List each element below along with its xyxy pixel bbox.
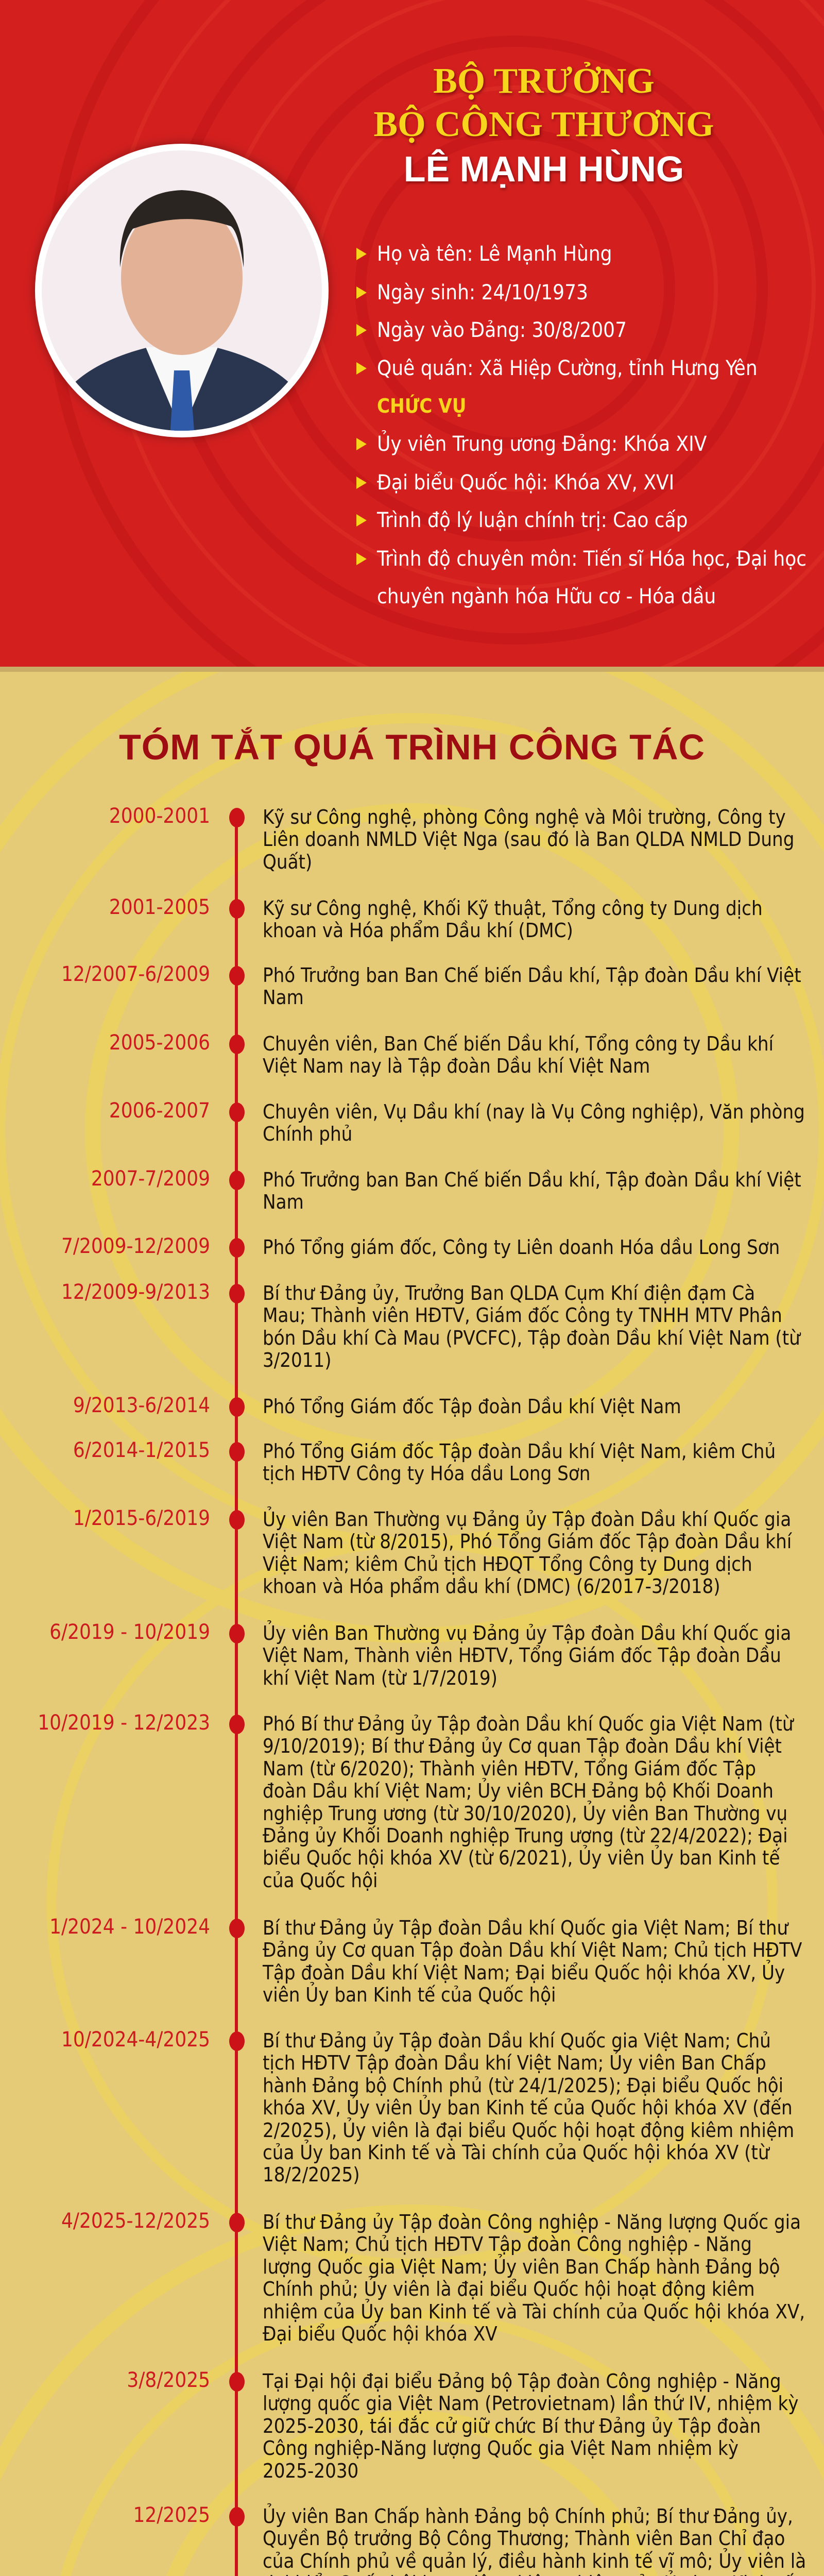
entry 2005-2006: 2005-2006: [109, 1031, 210, 1055]
section heading: TÓM TẮT QUÁ TRÌNH CÔNG TÁC: [119, 727, 705, 767]
entry 6/2019-10/2019: [49, 1620, 791, 1689]
entry 1/2015-6/2019: [73, 1506, 792, 1598]
entry 1/2024-10/2024: Bí thư Đảng ủy Tập đoàn Dầu khí Quốc gia Việt Nam; Bí thư: [263, 1917, 788, 1939]
entry 7/2009-12/2009: [61, 1234, 780, 1259]
info list: Đại biểu Quốc hội: Khóa XV, XVI: [377, 471, 674, 495]
title: BỘ TRƯỞNG: [433, 61, 655, 101]
entry 6/2014-1/2015: tịch HĐTV Công ty Hóa dầu Long Sơn: [263, 1462, 590, 1485]
info list: Ngày vào Đảng: 30/8/2007: [377, 318, 627, 342]
info list: Trình độ lý luận chính trị: Cao cấp: [377, 509, 688, 532]
entry 10/2024-4/2025: của Ủy ban Kinh tế và Tài chính của Quốc hội khóa XV (từ: [263, 2141, 769, 2164]
entry 10/2024-4/2025: 18/2/2025): [263, 2163, 360, 2186]
info list: CHỨC VỤ: [377, 395, 466, 417]
entry 6/2019-10/2019: Ủy viên Ban Thường vụ Đảng ủy Tập đoàn Dầu khí Quốc gia: [263, 1622, 791, 1645]
info list: Ủy viên Trung ương Đảng: Khóa XIV: [377, 432, 707, 456]
entry 3/8/2025: Công nghiệp-Năng lượng Quốc gia Việt Nam nhiệm kỳ: [263, 2437, 739, 2460]
entry 3/8/2025: lượng quốc gia Việt Nam (Petrovietnam) lần thứ IV, nhiệm kỳ: [263, 2392, 799, 2415]
entry 10/2019-12/2023: đoàn Dầu khí Việt Nam; Ủy viên BCH Đảng bộ Khối Doanh: [263, 1780, 774, 1802]
entry 2007-7/2009: Nam: [263, 1191, 304, 1213]
entry 1/2024-10/2024: viên Ủy ban Kinh tế của Quốc hội: [263, 1984, 556, 2006]
entry 1/2015-6/2019: Việt Nam; kiêm Chủ tịch HĐQT Tổng Công ty Dung dịch: [263, 1553, 752, 1575]
entry 2001-2005: 2001-2005: [109, 895, 210, 919]
entry 2006-2007: Chính phủ: [263, 1123, 352, 1145]
name: LÊ MẠNH HÙNG: [404, 149, 684, 189]
entry 2006-2007: 2006-2007: [109, 1099, 210, 1123]
entry 1/2024-10/2024: Tập đoàn Dầu khí Việt Nam; Đại biểu Quốc hội khóa XV, Ủy: [263, 1961, 785, 1984]
entry 2007-7/2009: Phó Trưởng ban Ban Chế biến Dầu khí, Tập đoàn Dầu khí Việt: [263, 1168, 801, 1191]
entry 4/2025-12/2025: Đại biểu Quốc hội khóa XV: [263, 2323, 497, 2345]
entry 9/2013-6/2014: 9/2013-6/2014: [73, 1394, 210, 1417]
entry 4/2025-12/2025: [61, 2209, 805, 2345]
entry 2000-2001: [109, 804, 794, 873]
entry 12/2007-6/2009: Phó Trưởng ban Ban Chế biến Dầu khí, Tập đoàn Dầu khí Việt: [263, 964, 801, 987]
entry 12/2007-6/2009: [61, 962, 801, 1009]
entry 1/2024-10/2024: Đảng ủy Cơ quan Tập đoàn Dầu khí Việt Nam; Chủ tịch HĐTV: [263, 1939, 802, 1961]
entry 4/2025-12/2025: 4/2025-12/2025: [61, 2209, 210, 2233]
entry 2006-2007: [109, 1099, 805, 1145]
entry 12/2025: [133, 2503, 806, 2576]
entry 6/2014-1/2015: 6/2014-1/2015: [73, 1438, 210, 1462]
entry 2005-2006: Chuyên viên, Ban Chế biến Dầu khí, Tổng công ty Dầu khí: [263, 1032, 774, 1055]
entry 10/2019-12/2023: của Quốc hội: [263, 1869, 378, 1892]
title: [373, 61, 715, 191]
entry 2000-2001: 2000-2001: [109, 804, 210, 828]
entry 9/2013-6/2014: [73, 1394, 681, 1418]
entry 12/2025: Ủy viên Ban Chấp hành Đảng bộ Chính phủ; Bí thư Đảng ủy,: [263, 2505, 793, 2528]
entry 3/8/2025: Tại Đại hội đại biểu Đảng bộ Tập đoàn Công nghiệp - Năng: [263, 2370, 781, 2393]
title: BỘ CÔNG THƯƠNG: [373, 105, 714, 144]
entry 1/2015-6/2019: khoan và Hóa phẩm dầu khí (DMC) (6/2017-3/2018): [263, 1575, 720, 1598]
entry 7/2009-12/2009: 7/2009-12/2009: [61, 1234, 210, 1258]
entry 12/2009-9/2013: 12/2009-9/2013: [61, 1280, 210, 1304]
entry 10/2024-4/2025: tịch HĐTV Tập đoàn Dầu khí Việt Nam; Ủy viên Ban Chấp: [263, 2052, 766, 2074]
entry 6/2019-10/2019: Việt Nam, Thành viên HĐTV, Tổng Giám đốc Tập đoàn Dầu: [263, 1644, 781, 1667]
entry 10/2019-12/2023: [38, 1711, 794, 1892]
entry 2007-7/2009: [91, 1167, 801, 1213]
entry 2001-2005: [109, 895, 763, 942]
header panel: [0, 0, 824, 667]
entry 2005-2006: Việt Nam nay là Tập đoàn Dầu khí Việt Nam: [263, 1055, 650, 1077]
entry 10/2024-4/2025: hành Đảng bộ Chính phủ (từ 24/1/2025); Đại biểu Quốc hội: [263, 2074, 783, 2097]
entry 1/2015-6/2019: 1/2015-6/2019: [73, 1506, 210, 1530]
entry 3/8/2025: 3/8/2025: [127, 2368, 210, 2392]
entry 12/2009-9/2013: 3/2011): [263, 1349, 332, 1371]
entry 12/2007-6/2009: Nam: [263, 986, 304, 1009]
entry 12/2009-9/2013: Bí thư Đảng ủy, Trưởng Ban QLDA Cụm Khí điện đạm Cà: [263, 1282, 755, 1304]
entry 12/2009-9/2013: bón Dầu khí Cà Mau (PVCFC), Tập đoàn Dầu khí Việt Nam (từ: [263, 1327, 800, 1349]
entry 4/2025-12/2025: lượng Quốc gia Việt Nam; Ủy viên Ban Chấp hành Đảng bộ: [263, 2256, 780, 2278]
entry 10/2024-4/2025: khóa XV, Ủy viên Ủy ban Kinh tế của Quốc hội khóa XV (đến: [263, 2096, 793, 2119]
entry 12/2009-9/2013: Mau; Thành viên HĐTV, Giám đốc Công ty TNHH MTV Phân: [263, 1304, 782, 1327]
entry 4/2025-12/2025: nhiệm của Ủy ban Kinh tế và Tài chính của Quốc hội khóa XV,: [263, 2300, 805, 2323]
entry 2000-2001: Kỹ sư Công nghệ, phòng Công nghệ và Môi trường, Công ty: [263, 806, 786, 828]
entry 10/2019-12/2023: nghiệp Trung ương (từ 30/10/2020), Ủy viên Ban Thường vụ: [263, 1802, 787, 1825]
entry 10/2024-4/2025: 2/2025), Ủy viên là đại biểu Quốc hội hoạt động kiêm nhiệm: [263, 2119, 794, 2142]
entry 3/8/2025: [127, 2368, 799, 2482]
entry 2000-2001: Quất): [263, 851, 312, 873]
info list: [356, 242, 806, 608]
entry 12/2025: 12/2025: [133, 2503, 210, 2527]
entry 3/8/2025: 2025-2030, tái đắc cử giữ chức Bí thư Đảng ủy Tập đoàn: [263, 2415, 761, 2437]
entry 6/2019-10/2019: 6/2019 - 10/2019: [49, 1620, 210, 1644]
entry 10/2024-4/2025: 10/2024-4/2025: [61, 2028, 210, 2052]
entry 7/2009-12/2009: Phó Tổng giám đốc, Công ty Liên doanh Hóa dầu Long Sơn: [263, 1236, 780, 1259]
entry 10/2019-12/2023: 9/10/2019); Bí thư Đảng ủy Cơ quan Tập đoàn Dầu khí Việt: [263, 1735, 782, 1757]
entry 4/2025-12/2025: Bí thư Đảng ủy Tập đoàn Công nghiệp - Năng lượng Quốc gia: [263, 2211, 801, 2233]
entry 10/2024-4/2025: Bí thư Đảng ủy Tập đoàn Dầu khí Quốc gia Việt Nam; Chủ: [263, 2029, 771, 2052]
entry 6/2014-1/2015: [73, 1438, 776, 1485]
entry 1/2024-10/2024: [49, 1915, 802, 2006]
entry 4/2025-12/2025: Việt Nam; Chủ tịch HĐTV Tập đoàn Công nghiệp - Năng: [263, 2233, 752, 2256]
entry 10/2019-12/2023: Phó Bí thư Đảng ủy Tập đoàn Dầu khí Quốc gia Việt Nam (từ: [263, 1713, 794, 1735]
info list: Trình độ chuyên môn: Tiến sĩ Hóa học, Đại học: [377, 547, 806, 571]
info list: chuyên ngành hóa Hữu cơ - Hóa dầu: [377, 585, 716, 608]
entry 2001-2005: khoan và Hóa phẩm Dầu khí (DMC): [263, 919, 573, 942]
entry 10/2019-12/2023: 10/2019 - 12/2023: [38, 1711, 210, 1735]
entry 10/2019-12/2023: biểu Quốc hội khóa XV (từ 6/2021), Ủy viên Ủy ban Kinh tế: [263, 1846, 780, 1869]
info list: Ngày sinh: 24/10/1973: [377, 281, 588, 304]
entry 2001-2005: Kỹ sư Công nghệ, Khối Kỹ thuật, Tổng công ty Dung dịch: [263, 897, 763, 920]
entry 1/2024-10/2024: 1/2024 - 10/2024: [49, 1915, 210, 1939]
entry 3/8/2025: 2025-2030: [263, 2460, 358, 2482]
entry 2007-7/2009: 2007-7/2009: [91, 1167, 210, 1191]
entry 6/2014-1/2015: Phó Tổng Giám đốc Tập đoàn Dầu khí Việt Nam, kiêm Chủ: [263, 1440, 776, 1463]
info list: Quê quán: Xã Hiệp Cường, tỉnh Hưng Yên: [377, 357, 758, 380]
entry 1/2015-6/2019: Việt Nam (từ 8/2015), Phó Tổng Giám đốc Tập đoàn Dầu khí: [263, 1530, 792, 1553]
entry 12/2025: của Chính phủ về quản lý, điều hành kinh tế vĩ mô; Ủy viên là: [263, 2550, 806, 2572]
entry 1/2015-6/2019: Ủy viên Ban Thường vụ Đảng ủy Tập đoàn Dầu khí Quốc gia: [263, 1508, 791, 1531]
photo: [35, 144, 329, 437]
entry 10/2019-12/2023: Nam (từ 6/2020); Thành viên HĐTV, Tổng Giám đốc Tập: [263, 1757, 756, 1780]
entry 9/2013-6/2014: Phó Tổng Giám đốc Tập đoàn Dầu khí Việt Nam: [263, 1395, 681, 1418]
entry 12/2009-9/2013: [61, 1280, 801, 1371]
entry 12/2007-6/2009: 12/2007-6/2009: [61, 962, 210, 986]
entry 12/2025: Quyền Bộ trưởng Bộ Công Thương; Thành viên Ban Chỉ đạo: [263, 2527, 785, 2550]
info list: Họ và tên: Lê Mạnh Hùng: [377, 242, 612, 266]
entry 2000-2001: Liên doanh NMLD Việt Nga (sau đó là Ban QLDA NMLD Dung: [263, 828, 794, 851]
entry 4/2025-12/2025: Chính phủ; Ủy viên là đại biểu Quốc hội hoạt động kiêm: [263, 2278, 755, 2300]
timeline panel background: [0, 667, 824, 2576]
timeline: [235, 827, 238, 2576]
entry 10/2019-12/2023: Đảng ủy Khối Doanh nghiệp Trung ương (từ 22/4/2022); Đại: [263, 1824, 788, 1847]
entry 6/2019-10/2019: khí Việt Nam (từ 1/7/2019): [263, 1667, 497, 1689]
entry 10/2024-4/2025: [61, 2028, 794, 2186]
entry 2006-2007: Chuyên viên, Vụ Dầu khí (nay là Vụ Công nghiệp), Văn phòng: [263, 1100, 805, 1123]
entry 2005-2006: [109, 1031, 774, 1077]
